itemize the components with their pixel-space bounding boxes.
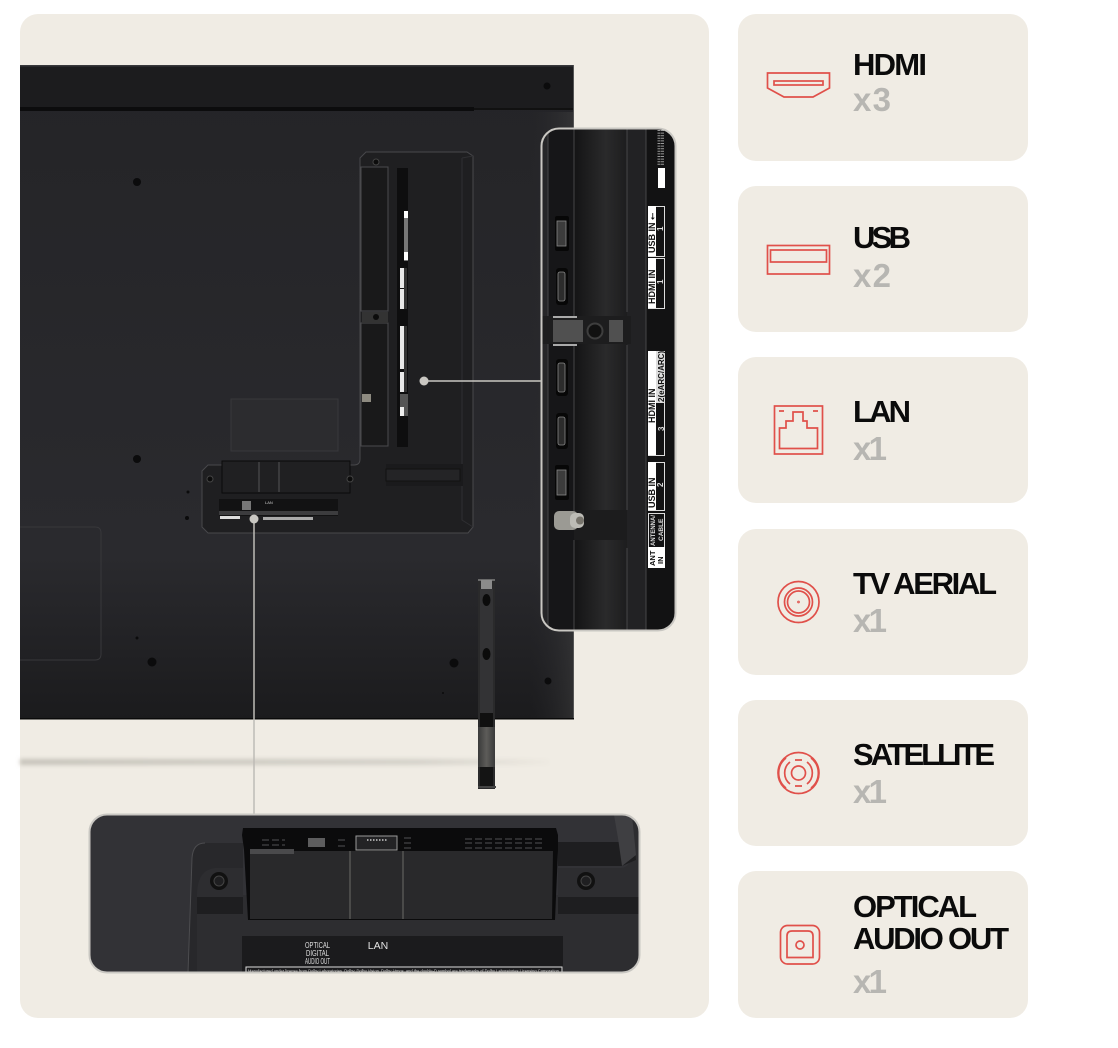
inset: bottom connectors <box>89 814 640 975</box>
faint recessed plates <box>20 399 338 660</box>
heading: SATELLITE: SATELLITE <box>853 737 995 772</box>
count: x3: x3 <box>853 81 891 118</box>
port: HDMI 1 <box>556 268 568 305</box>
label: HDMI IN 2 and 3: 2(eARC/ARC) <box>657 351 666 402</box>
card: LAN <box>738 357 1028 503</box>
card: HDMI <box>738 14 1028 161</box>
rear lower label <box>219 499 338 520</box>
card: USB <box>738 186 1028 332</box>
label: USB IN 2: 2 <box>656 482 665 487</box>
port: HDMI 3 <box>556 413 568 449</box>
icon: HDMI port <box>768 73 830 97</box>
printed rating label: OPTICAL <box>305 940 330 950</box>
port: coaxial aerial <box>554 511 584 530</box>
heading: TV AERIAL: TV AERIAL <box>853 566 997 601</box>
icon: optical socket <box>780 926 820 964</box>
TV back <box>20 65 574 720</box>
label: USB IN 1: ⭠ <box>647 212 657 220</box>
callout line to bottom inset <box>250 514 258 815</box>
label: HDMI IN 1: 1 <box>656 279 665 284</box>
count: x1: x1 <box>853 430 887 467</box>
label: antenna in: IN <box>656 556 665 564</box>
label: HDMI IN 2 and 3: 3 <box>657 426 666 431</box>
port: USB 2 <box>555 465 569 500</box>
port: USB 1 <box>555 216 569 251</box>
callout line to side inset <box>420 376 541 386</box>
printed rating label: DIGITAL <box>306 948 329 958</box>
printed rating label: Manufactured under license from Dolby Laboratories. Dolby, Dolby Vision, Dolby Atmos, and the double-D symbol are trademarks of Dolby Laboratories Licensing Corporation. <box>248 968 560 974</box>
printed rating label <box>242 936 563 975</box>
label: antenna in: ANTENNA/ <box>650 515 657 546</box>
label: HDMI IN 2 and 3: HDMI IN <box>647 388 657 423</box>
heading: LAN: LAN <box>853 394 911 429</box>
rear label strip <box>397 168 408 447</box>
icon: LAN port <box>774 406 822 454</box>
printed rating label: AUDIO OUT <box>305 956 330 966</box>
heading: HDMI: HDMI <box>853 47 927 82</box>
count: x1: x1 <box>853 773 887 810</box>
stand shadow <box>20 759 550 765</box>
card: satellite <box>738 700 1028 846</box>
label: USB IN 1: 1 <box>656 226 665 231</box>
optical and LAN bracket <box>242 828 558 920</box>
heading: OPTICAL AUDIO OUT: OPTICAL <box>853 889 977 924</box>
stand leg <box>478 579 496 789</box>
clamp <box>542 316 623 346</box>
count: x1: x1 <box>853 602 887 639</box>
icon: aerial socket <box>778 582 819 622</box>
label: HDMI IN 1: HDMI IN <box>647 270 657 304</box>
label: antenna in: ANT <box>648 550 657 566</box>
screw right <box>577 872 595 890</box>
icon: satellite socket <box>778 752 819 794</box>
label: antenna in: CABLE <box>658 518 665 541</box>
barcode sticker <box>658 130 665 188</box>
icon: USB port <box>768 246 830 274</box>
heading: OPTICAL AUDIO OUT <box>853 889 1009 956</box>
label: HDMI IN 1 <box>647 258 665 308</box>
mounting holes <box>133 82 552 694</box>
inset: side connectors <box>541 128 676 631</box>
label: USB IN 1: USB IN <box>647 222 657 253</box>
heading: OPTICAL AUDIO OUT: AUDIO OUT <box>853 921 1009 956</box>
rear connector bay <box>202 152 473 533</box>
port: HDMI 2 <box>556 359 568 396</box>
printed rating label: LAN <box>368 940 388 952</box>
panel: TV rear view <box>20 14 709 1018</box>
label: antenna in <box>648 514 665 568</box>
label: HDMI IN 2 and 3 <box>648 351 665 456</box>
screw left <box>210 872 228 890</box>
count: x2: x2 <box>853 257 891 294</box>
count: x1: x1 <box>853 963 887 1000</box>
rear lower label: LAN <box>265 500 273 505</box>
label: USB IN 2 <box>647 462 665 510</box>
heading: USB: USB <box>853 220 911 255</box>
card: TV aerial <box>738 529 1028 675</box>
label: USB IN 2: USB IN <box>647 477 657 508</box>
card: optical audio out <box>738 871 1028 1018</box>
label: USB IN 1 <box>647 206 665 256</box>
